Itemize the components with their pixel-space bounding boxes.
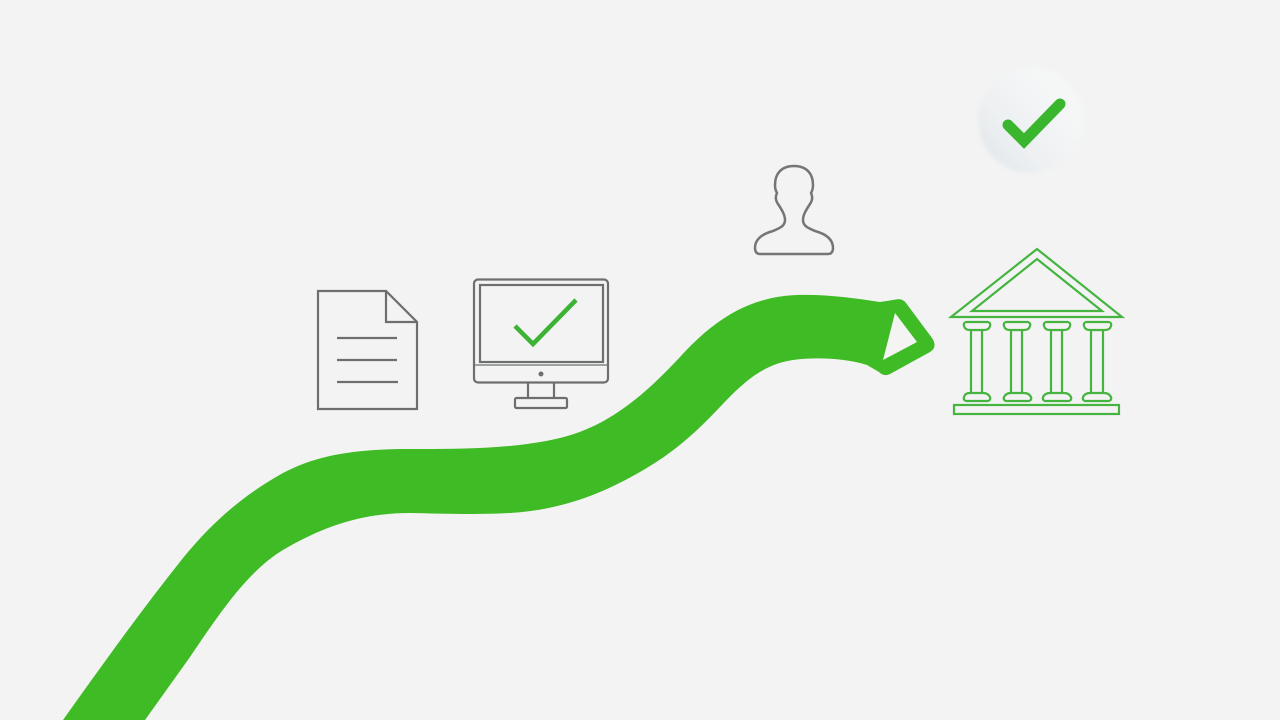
icon: person [755,166,833,254]
check mark on screen [515,300,576,344]
icon: computer monitor with check [474,280,608,408]
icon: bank building [951,249,1122,414]
columns [964,322,1111,401]
green ribbon arrow path [63,295,935,720]
icon: check badge [978,67,1084,173]
arrow head triangle [883,313,917,360]
icon: document [318,291,417,409]
